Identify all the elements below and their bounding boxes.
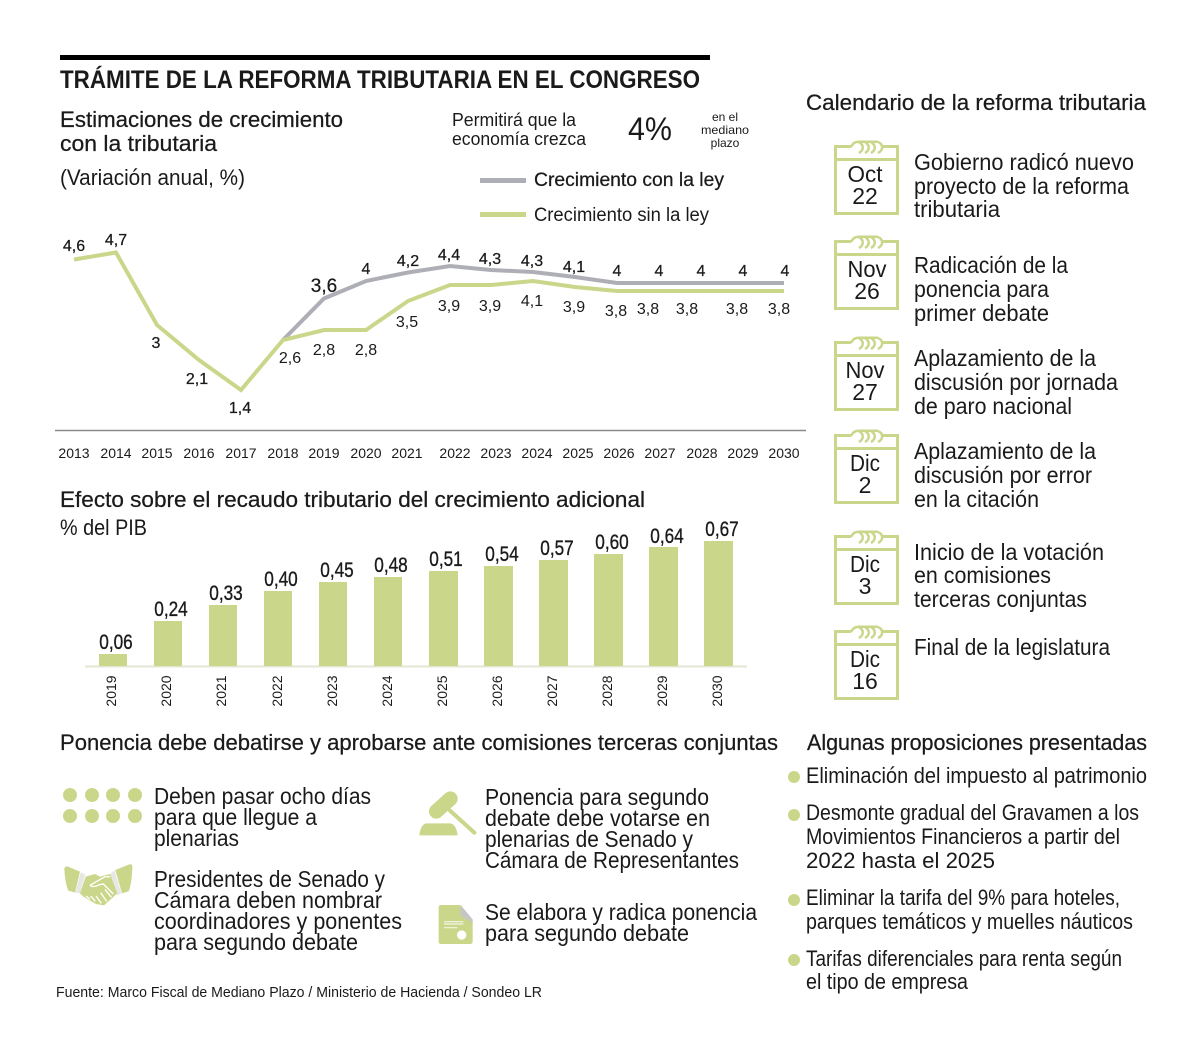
step: eight days: plenarias: [154, 825, 239, 851]
calendar: Nov 26: primer debate: [914, 300, 1049, 326]
values: upper series: 4: [362, 261, 371, 278]
callout: 4%: 4%: [628, 111, 672, 147]
bar values: 0,51: [429, 549, 463, 571]
x axis: 2023: [480, 445, 512, 461]
bar years: 2029: [654, 675, 670, 707]
title: [60, 55, 710, 94]
bar values: [99, 519, 739, 654]
x axis: 2026: [603, 445, 635, 461]
callout: 4%: mediano: [701, 123, 749, 137]
calendar: Nov 27: de paro nacional: [914, 393, 1072, 419]
proposal 3: [788, 885, 1133, 934]
values: lower series: 2,8: [313, 342, 335, 359]
legend: Crecimiento con la ley: [534, 170, 724, 191]
calendar: Dic 2: en la citación: [914, 486, 1039, 512]
values: upper series: 4: [613, 263, 622, 280]
values: upper series: 4,3: [479, 251, 501, 268]
calendar: Nov 27: 27: [852, 379, 878, 405]
step: eight days: para que llegue a: [154, 804, 317, 830]
proposal 2: 2022 hasta el 2025: [806, 848, 995, 873]
values: lower series: 3,8: [726, 301, 748, 318]
bar values: 0,57: [540, 538, 574, 560]
heading: growth estimates: (Variación anual, %): [60, 165, 245, 190]
bar years: 2025: [434, 675, 450, 707]
values: upper series: 4: [655, 263, 664, 280]
line: with reform: [283, 266, 784, 340]
x axis: 2015: [141, 445, 173, 461]
values: upper series: 3: [152, 335, 161, 352]
x axis: 2018: [267, 445, 299, 461]
heading: debate: Ponencia debe debatirse y aprobarse ante comisiones terceras conjuntas: [60, 730, 778, 755]
values: lower series: 3,9: [479, 298, 501, 315]
values: upper series: 4,7: [105, 232, 127, 249]
x axis: 2019: [308, 445, 340, 461]
calendar: Oct 22: 22: [852, 183, 878, 209]
values: upper series: 3,6: [311, 276, 337, 297]
bar years: 2023: [324, 675, 340, 707]
values: upper series: 4: [697, 263, 706, 280]
calendar: Dic 2: Aplazamiento de la: [914, 438, 1096, 464]
calendar: Dic 16: Final de la legislatura: [914, 634, 1110, 660]
values: lower series: 3,9: [438, 298, 460, 315]
x axis: 2029: [727, 445, 759, 461]
values: lower series: 2,6: [279, 350, 301, 367]
x axis: 2030: [768, 445, 800, 461]
callout: 4%: economía crezca: [452, 129, 587, 149]
callout: 4%: en el: [712, 110, 738, 124]
calendar: Oct 22: Gobierno radicó nuevo: [914, 149, 1134, 175]
bar values: 0,24: [154, 599, 188, 621]
calendar: Nov 26: 26: [854, 278, 880, 304]
calendar: Dic 3: en comisiones: [914, 562, 1051, 588]
source: Fuente: Marco Fiscal de Mediano Plazo / Ministerio de Hacienda / Sondeo LR: [56, 985, 542, 1001]
icon: handshake: [64, 864, 132, 905]
heading: revenue effect: % del PIB: [60, 515, 147, 540]
x axis: 2014: [100, 445, 132, 461]
calendar: Oct 22: [836, 142, 1134, 222]
line: without reform: [74, 252, 784, 390]
legend: [480, 170, 724, 226]
bar values: 0,64: [650, 526, 684, 548]
line chart: [55, 232, 806, 461]
proposal 2: Desmonte gradual del Gravamen a los: [806, 800, 1139, 825]
x axis: 2028: [686, 445, 718, 461]
x axis: 2022: [439, 445, 471, 461]
icon: document: [439, 905, 473, 944]
x axis: 2020: [350, 445, 382, 461]
calendar: Dic 16: [836, 627, 1110, 698]
x axis: [55, 430, 806, 461]
step: file report: para segundo debate: [485, 920, 689, 946]
icon: gavel: [419, 799, 474, 835]
step: eight days: [63, 783, 371, 851]
calendar: Nov 27: discusión por jornada: [914, 369, 1118, 395]
proposal 3: parques temáticos y muelles náuticos: [806, 909, 1133, 934]
values: lower series: 4,1: [521, 293, 543, 310]
step: second debate: Ponencia para segundo: [485, 784, 709, 810]
callout: 4%: Permitirá que la: [452, 110, 577, 130]
bar values: 0,60: [595, 532, 629, 554]
values: upper series: 4,2: [397, 253, 419, 270]
bar values: 0,67: [705, 519, 739, 541]
callout: 4%: [452, 110, 749, 150]
bar years: 2028: [599, 675, 615, 707]
bar values: 0,06: [99, 632, 133, 654]
bar years: 2020: [158, 675, 174, 707]
step: second debate: debate debe votarse en: [485, 805, 710, 831]
bar years: 2021: [213, 675, 229, 707]
proposal 4: el tipo de empresa: [806, 969, 969, 994]
bar years: 2019: [103, 675, 119, 707]
calendar: Nov 26: [836, 237, 1068, 326]
bar values: 0,40: [264, 569, 298, 591]
bar years: 2030: [709, 675, 725, 707]
heading: revenue effect: Efecto sobre el recaudo tributario del crecimiento adicional: [60, 487, 645, 512]
values: upper series: [63, 232, 790, 417]
x axis: 2016: [183, 445, 215, 461]
calendar: Dic 2: Dic: [850, 450, 880, 476]
values: upper series: 4: [781, 263, 790, 280]
step: file report: [439, 899, 757, 946]
heading: proposals: Algunas proposiciones presentadas: [807, 730, 1147, 755]
calendar: Dic 3: [836, 532, 1104, 612]
values: lower series: [279, 293, 790, 367]
x axis: 2027: [644, 445, 676, 461]
proposal 3: Eliminar la tarifa del 9% para hoteles,: [806, 885, 1120, 910]
calendar: Dic 3: Dic: [850, 551, 880, 577]
calendar: Nov 26: Radicación de la: [914, 252, 1068, 278]
calendar: Dic 3: 3: [859, 573, 871, 599]
calendar: Dic 16: 16: [852, 668, 878, 694]
heading: growth estimates: Estimaciones de crecimiento: [60, 107, 343, 132]
x axis: 2013: [58, 445, 90, 461]
title: TRÁMITE DE LA REFORMA TRIBUTARIA EN EL CONGRESO: [60, 65, 700, 94]
step: second debate: plenarias de Senado y: [485, 826, 693, 852]
step: presidents: coordinadores y ponentes: [154, 908, 402, 934]
calendar: Oct 22: Oct: [848, 161, 883, 187]
calendar: Dic 3: Inicio de la votación: [914, 539, 1104, 565]
x axis: 2021: [391, 445, 423, 461]
bar years: 2027: [544, 675, 560, 707]
calendar: Nov 27: [836, 338, 1118, 419]
bar years: 2024: [379, 675, 395, 707]
step: presidents: [64, 864, 402, 955]
calendar: Dic 16: Dic: [850, 646, 880, 672]
bar years: 2022: [269, 675, 285, 707]
values: lower series: 3,8: [676, 301, 698, 318]
calendar: Dic 3: terceras conjuntas: [914, 586, 1087, 612]
x axis: 2017: [225, 445, 257, 461]
calendar: Nov 27: Aplazamiento de la: [914, 345, 1096, 371]
step: presidents: para segundo debate: [154, 929, 358, 955]
calendar: Dic 2: [836, 431, 1096, 512]
heading: calendar: Calendario de la reforma tributaria: [806, 90, 1147, 115]
bar values: 0,54: [485, 544, 519, 566]
values: upper series: 4: [739, 263, 748, 280]
values: upper series: 4,3: [521, 253, 543, 270]
heading: growth estimates: con la tributaria: [60, 131, 218, 156]
proposal 2: Movimientos Financieros a partir del: [806, 824, 1120, 849]
calendar: Nov 26: ponencia para: [914, 276, 1049, 302]
calendar: Oct 22: proyecto de la reforma: [914, 173, 1129, 199]
values: upper series: 4,1: [563, 259, 585, 276]
values: lower series: 3,5: [396, 314, 418, 331]
heading: growth estimates: [60, 107, 343, 190]
proposal 4: [788, 946, 1122, 994]
calendar: Dic 2: 2: [859, 472, 871, 498]
values: upper series: 2,1: [186, 371, 208, 388]
x axis: 2024: [521, 445, 553, 461]
bar years: 2026: [489, 675, 505, 707]
values: lower series: 3,8: [768, 301, 790, 318]
values: upper series: 4,4: [438, 247, 460, 264]
legend: Crecimiento sin la ley: [534, 205, 709, 226]
calendar: Nov 27: Nov: [846, 357, 885, 383]
step: second debate: Cámara de Representantes: [485, 847, 739, 873]
bar values: 0,48: [374, 555, 408, 577]
step: presidents: Presidentes de Senado y: [154, 866, 385, 892]
values: upper series: 1,4: [229, 400, 251, 417]
icon: dots: [63, 788, 142, 823]
proposal 2: [788, 800, 1139, 873]
values: lower series: 3,9: [563, 299, 585, 316]
bar years: [103, 675, 725, 707]
proposal 4: Tarifas diferenciales para renta según: [806, 946, 1122, 971]
step: second debate: [419, 784, 739, 873]
heading: revenue effect: [60, 487, 645, 540]
step: eight days: Deben pasar ocho días: [154, 783, 371, 809]
calendar: Nov 26: Nov: [848, 256, 887, 282]
bars: [99, 541, 733, 666]
bar values: 0,45: [320, 560, 354, 582]
calendar: Dic 2: discusión por error: [914, 462, 1092, 488]
values: lower series: 2,8: [355, 342, 377, 359]
step: presidents: Cámara deben nombrar: [154, 887, 382, 913]
bar chart: [85, 519, 747, 707]
step: file report: Se elabora y radica ponencia: [485, 899, 757, 925]
bar values: 0,33: [209, 583, 243, 605]
callout: 4%: plazo: [711, 136, 740, 150]
proposal 1: Eliminación del impuesto al patrimonio: [806, 763, 1147, 788]
calendar: Oct 22: tributaria: [914, 196, 1000, 222]
values: lower series: 3,8: [637, 301, 659, 318]
values: upper series: 4,6: [63, 238, 85, 255]
values: lower series: 3,8: [605, 303, 627, 320]
x axis: 2025: [562, 445, 594, 461]
